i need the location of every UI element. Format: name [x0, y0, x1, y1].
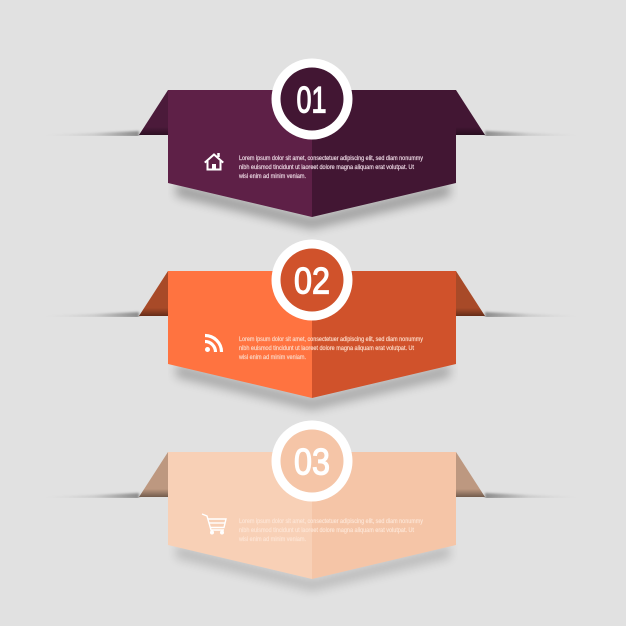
ribbon drop shadow: [176, 183, 450, 229]
panel: step 02: [40, 240, 582, 410]
body text: nibh euismod tincidunt ut laoreet dolore magna aliquam erat volutpat. Ut: [239, 164, 414, 171]
number badge: 02: [294, 260, 330, 302]
ribbon left face: [168, 90, 312, 217]
number badge: 03: [294, 442, 330, 482]
body text: nibh euismod tincidunt ut laoreet dolore magna aliquam erat volutpat. Ut: [239, 527, 414, 534]
body text: wisi enim ad minim veniam.: [238, 354, 306, 361]
body text: Lorem ipsum dolor sit amet, consectetuer adipiscing elit, sed diam nonummy: [239, 155, 423, 162]
icon: rss feed: [205, 336, 222, 352]
panel: step 03: [73, 420, 550, 594]
left fold flap: [139, 271, 168, 316]
body text: [238, 336, 423, 361]
icon: shopping cart: [202, 514, 226, 534]
panel: step 01: [40, 58, 582, 229]
body text: nibh euismod tincidunt ut laoreet dolore magna aliquam erat volutpat. Ut: [239, 345, 414, 352]
left fold flap: [139, 452, 168, 497]
right slit shadow: [484, 310, 550, 317]
ribbon drop shadow: [176, 364, 450, 410]
right slit shadow: [484, 492, 550, 498]
body text: Lorem ipsum dolor sit amet, consectetuer adipiscing elit, sed diam nonummy: [239, 518, 423, 525]
number badge: 01: [296, 80, 326, 120]
body text: Lorem ipsum dolor sit amet, consectetuer adipiscing elit, sed diam nonummy: [239, 336, 423, 343]
icon: house: [206, 153, 222, 170]
ribbon right face: [312, 271, 456, 398]
body text: [238, 518, 423, 543]
body text: wisi enim ad minim veniam.: [238, 173, 306, 180]
body text: [238, 155, 423, 180]
left slit shadow: [73, 310, 140, 317]
left fold flap: [139, 90, 168, 135]
ribbon drop shadow: [176, 545, 450, 591]
ribbon right face: [312, 90, 456, 217]
ribbon left face: [168, 271, 312, 398]
number badge: [272, 420, 352, 502]
body text: wisi enim ad minim veniam.: [238, 536, 306, 543]
left slit shadow: [73, 492, 140, 498]
flap base shading: [139, 271, 485, 316]
right fold flap: [456, 90, 485, 135]
number badge: [272, 240, 352, 320]
flap base shading: [139, 452, 485, 497]
flap base shading: [139, 90, 485, 135]
right fold flap: [456, 271, 485, 316]
left slit shadow: [73, 130, 140, 136]
ribbon left face: [168, 452, 312, 579]
right fold flap: [456, 452, 485, 497]
number badge: [272, 58, 352, 140]
right slit shadow: [484, 130, 550, 136]
ribbon right face: [312, 452, 456, 579]
